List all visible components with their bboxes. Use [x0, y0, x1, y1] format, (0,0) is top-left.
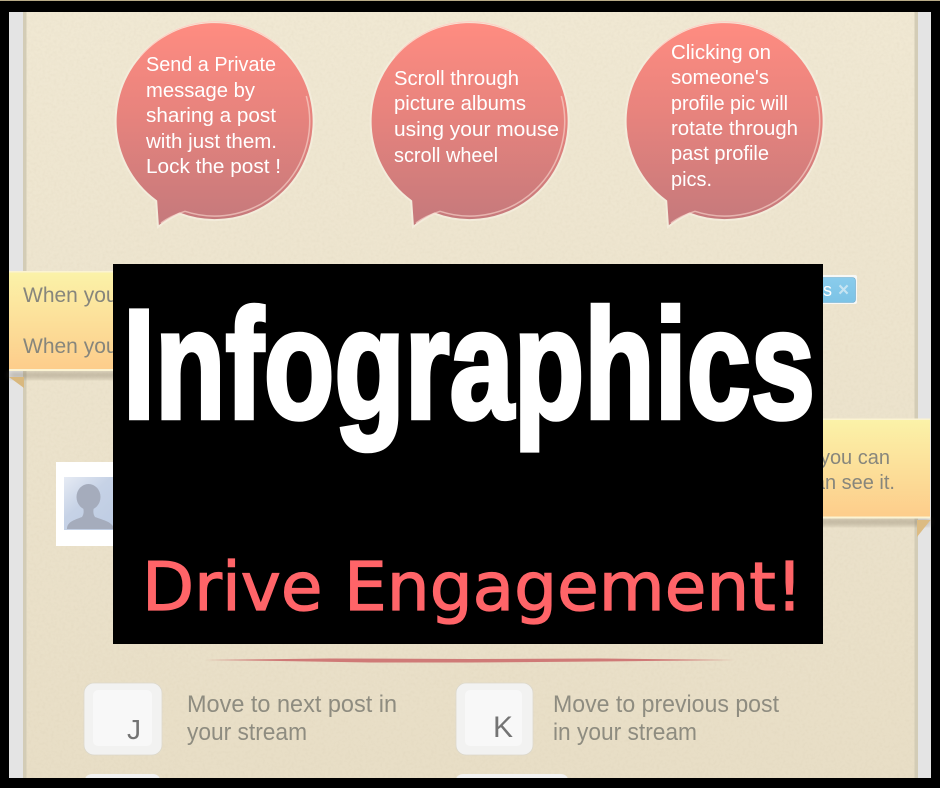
bubble text: pics.	[671, 169, 712, 191]
bubble text: with just them.	[145, 131, 277, 153]
key cap K	[456, 683, 533, 755]
ribbon fold	[9, 377, 24, 388]
key cap K: K	[493, 711, 513, 744]
panel: speech bubble, private message	[116, 22, 314, 227]
avatar placeholder card	[56, 462, 126, 546]
bubble text: Send a Private	[146, 54, 276, 76]
top edge sliver	[0, 0, 940, 1]
bubble text: someone's	[671, 67, 769, 89]
ribbon text: When you	[23, 335, 118, 358]
decorative red brush line	[205, 658, 735, 662]
bubble text: Lock the post !	[146, 156, 281, 178]
bubble text: picture albums	[394, 93, 526, 115]
bubble text: past profile	[671, 143, 769, 165]
bubble text: Clicking on	[671, 42, 771, 64]
J key description	[187, 691, 397, 746]
right grey margin strip	[918, 12, 931, 778]
bottom black frame edge	[0, 778, 940, 788]
K key shortcut	[456, 683, 779, 755]
left grey margin strip	[9, 12, 23, 778]
panel: right yellow ribbon	[814, 418, 930, 537]
bubble text: sharing a post	[146, 105, 276, 127]
subtitle: Drive Engagement!	[142, 548, 803, 626]
blue tag chip: s	[823, 280, 832, 300]
panel: black title card	[113, 264, 823, 644]
bubble text: rotate through	[671, 118, 798, 140]
bubble text: using your mouse	[394, 119, 559, 141]
bubble text: scroll wheel	[394, 145, 498, 167]
bubble text	[145, 54, 281, 178]
ribbon text: you can	[820, 447, 890, 469]
icon: silhouette	[67, 484, 114, 529]
partially visible lower right key	[456, 774, 568, 786]
bubble text	[394, 68, 559, 167]
bubble text: Scroll through	[394, 68, 519, 90]
K key description: Move to previous post	[553, 691, 779, 718]
ribbon text: an see it.	[814, 472, 895, 494]
bubble text	[671, 42, 798, 191]
bubble text: message by	[146, 80, 255, 102]
bubble text: profile pic will	[671, 93, 788, 115]
key cap J: J	[127, 714, 141, 745]
ribbon fold	[917, 520, 930, 537]
J key description: Move to next post in	[187, 691, 397, 718]
K key description	[553, 691, 779, 746]
panel: speech bubble, picture albums	[371, 22, 569, 227]
key cap J	[84, 683, 162, 755]
blue tag chip	[800, 275, 857, 304]
ribbon text	[814, 447, 895, 494]
panel: speech bubble, profile pics	[626, 22, 824, 227]
K key description: in your stream	[553, 719, 697, 746]
panel: left yellow ribbon	[9, 271, 119, 388]
ribbon text: When you	[23, 284, 118, 307]
partially visible lower left key	[85, 774, 160, 786]
ribbon text	[23, 284, 118, 358]
J key description: your stream	[187, 719, 307, 746]
blue tag chip: ×	[838, 280, 849, 301]
J key shortcut	[84, 683, 397, 755]
